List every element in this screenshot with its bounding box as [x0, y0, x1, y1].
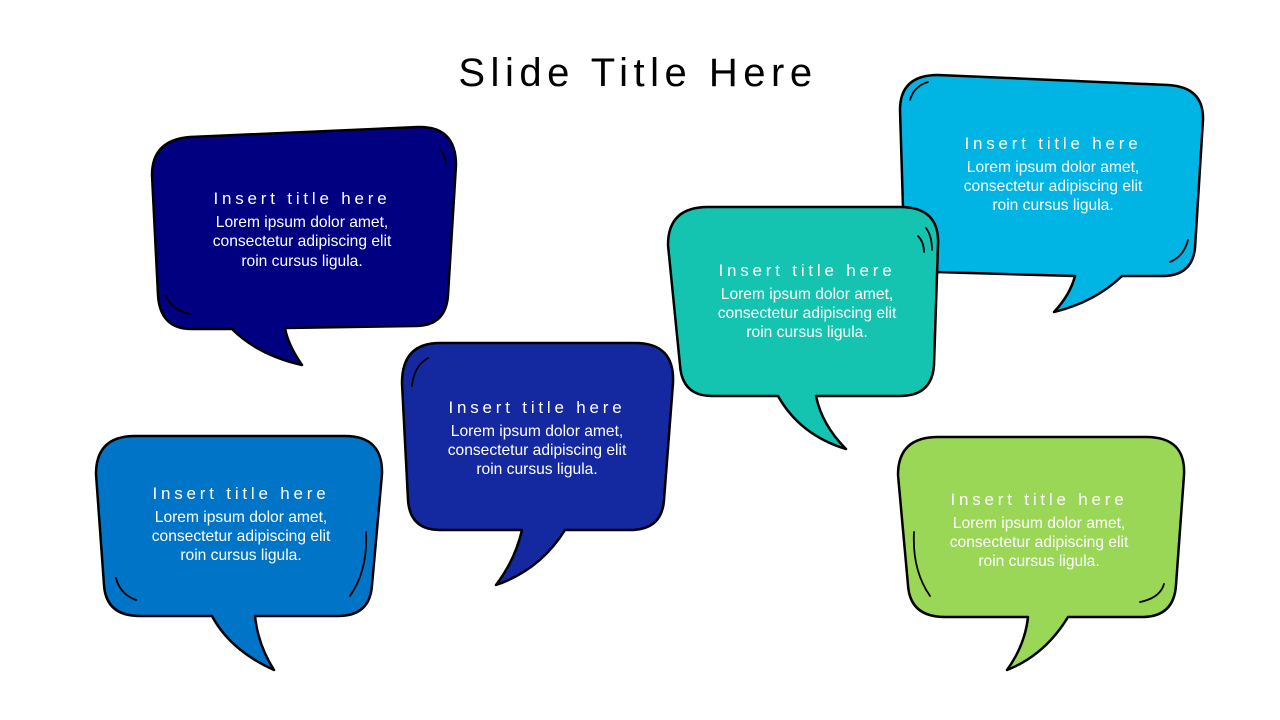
bubble: teal center-right: roin cursus ligula.: [746, 324, 868, 341]
bubble: navy top-left: Insert title here: [213, 189, 391, 208]
bubble: teal center-right: [668, 207, 938, 449]
bubble: blue bottom-left: Lorem ipsum dolor amet,: [155, 509, 327, 526]
bubble: teal center-right: Insert title here: [718, 261, 896, 280]
bubble: light blue top-right: Insert title here: [964, 134, 1142, 153]
bubble: royal blue center: Insert title here: [448, 398, 626, 417]
bubble: royal blue center: consectetur adipiscing elit: [448, 442, 627, 459]
title: Slide Title Here: [458, 51, 818, 95]
bubble: royal blue center: [402, 343, 673, 585]
bubble: blue bottom-left: consectetur adipiscing elit: [152, 528, 331, 545]
bubble: teal center-right: consectetur adipiscing elit: [718, 305, 897, 322]
bubble: navy top-left: consectetur adipiscing elit: [213, 233, 392, 250]
bubble: green bottom-right: Insert title here: [950, 490, 1128, 509]
bubble: navy top-left: [152, 127, 456, 365]
bubble: teal center-right: Lorem ipsum dolor amet,: [721, 286, 893, 303]
bubble: royal blue center: roin cursus ligula.: [476, 461, 598, 478]
bubble: light blue top-right: consectetur adipiscing elit: [964, 178, 1143, 195]
bubble: green bottom-right: [898, 437, 1184, 670]
bubble: light blue top-right: Lorem ipsum dolor amet,: [967, 159, 1139, 176]
bubble: blue bottom-left: Insert title here: [152, 484, 330, 503]
bubble: navy top-left: roin cursus ligula.: [241, 253, 363, 270]
bubble: light blue top-right: roin cursus ligula.: [992, 197, 1114, 214]
bubble: light blue top-right: [900, 75, 1203, 312]
bubble: blue bottom-left: roin cursus ligula.: [180, 547, 302, 564]
bubble: green bottom-right: Lorem ipsum dolor amet,: [953, 515, 1125, 532]
bubble: blue bottom-left: [96, 436, 382, 670]
bubble: green bottom-right: roin cursus ligula.: [978, 553, 1100, 570]
bubble: green bottom-right: consectetur adipiscing elit: [950, 534, 1129, 551]
bubble: royal blue center: Lorem ipsum dolor amet,: [451, 423, 623, 440]
bubble: navy top-left: Lorem ipsum dolor amet,: [216, 214, 388, 231]
